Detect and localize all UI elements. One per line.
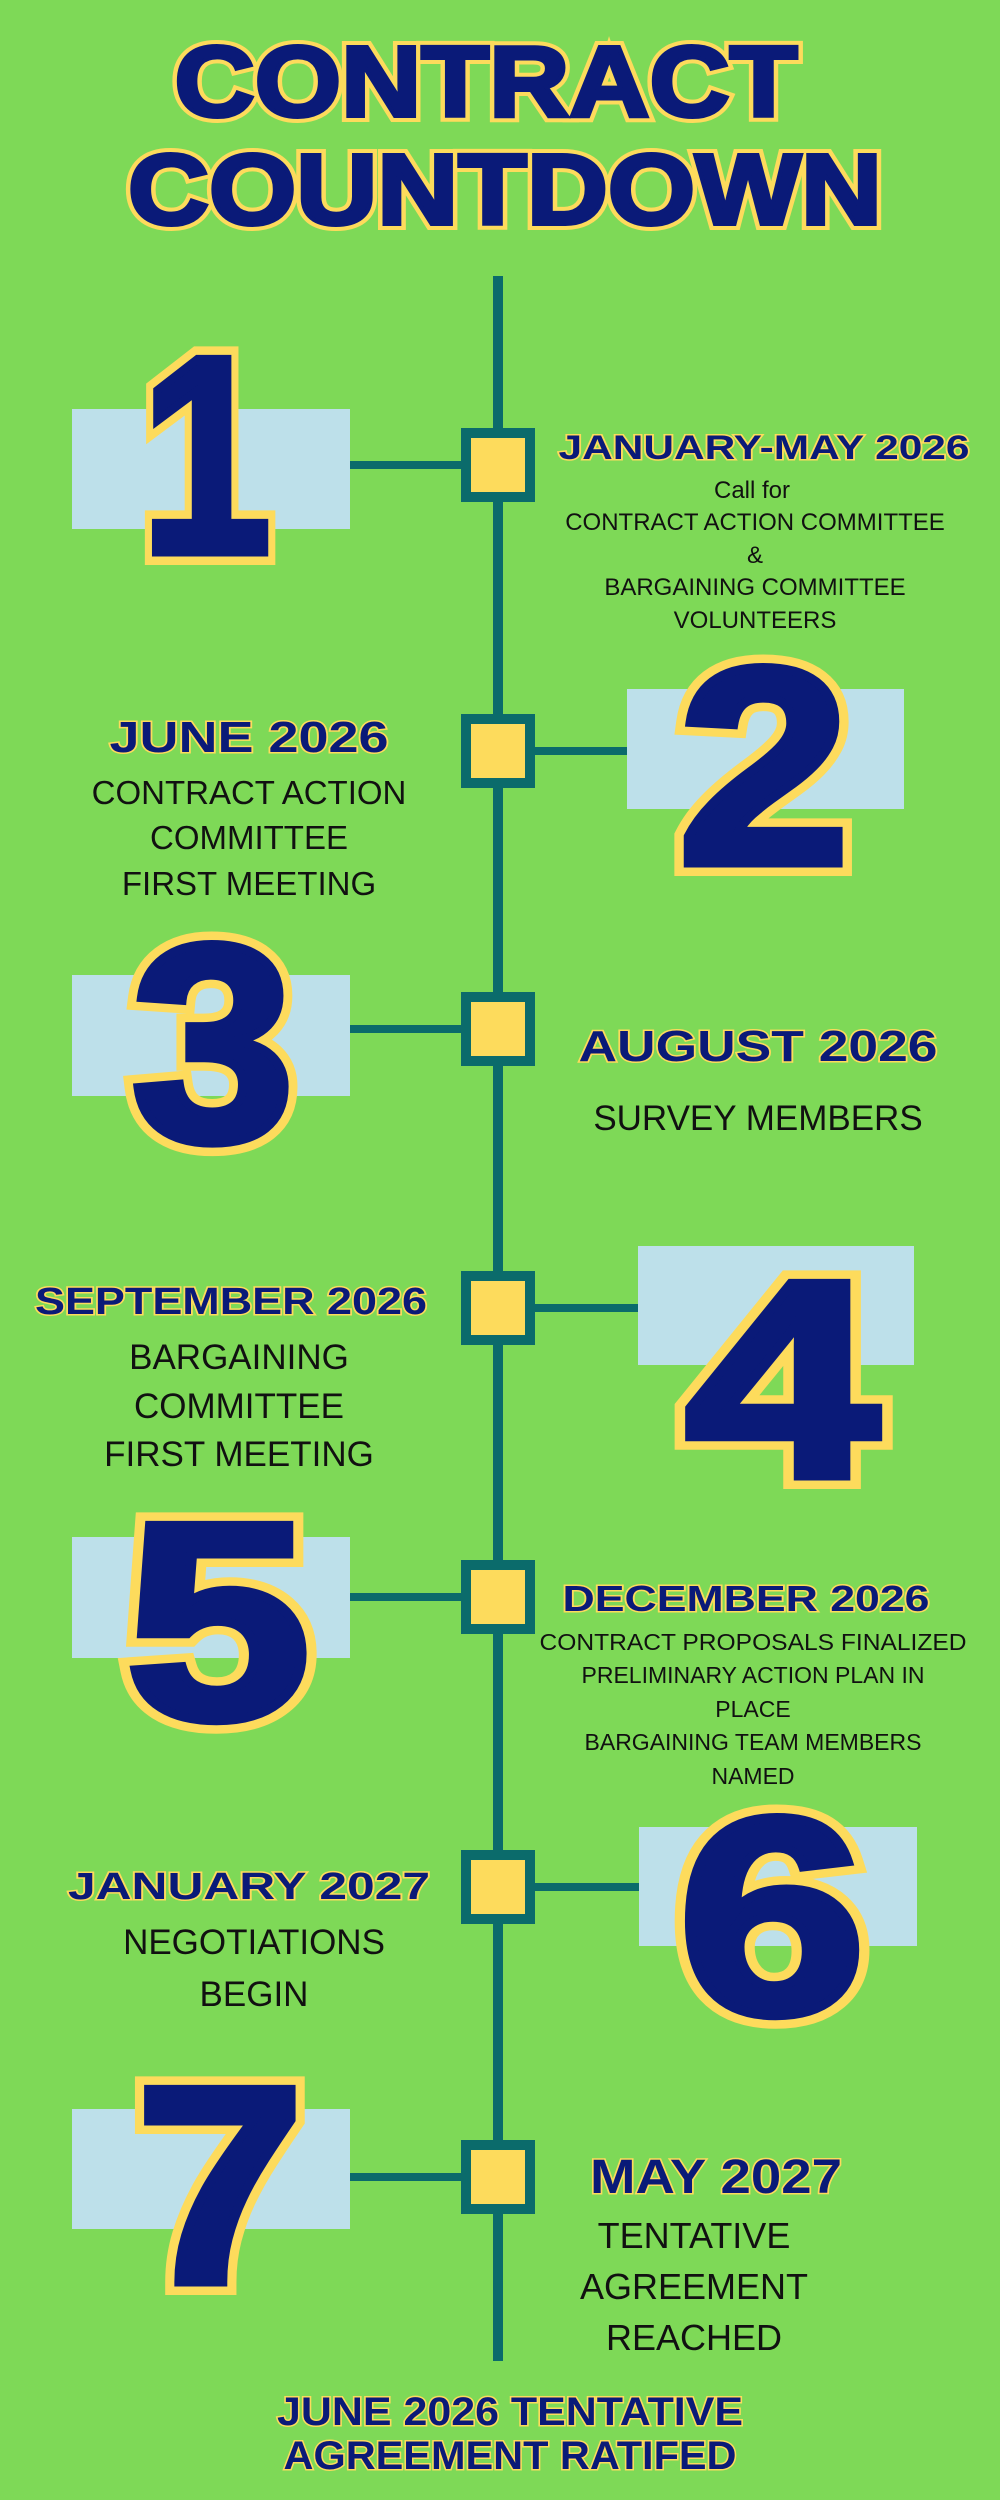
- number 1 block: [72, 300, 350, 612]
- text 6: JANUARY 2027: [68, 1866, 430, 1908]
- marker 4: [466, 1276, 530, 1340]
- connector 2: [535, 747, 627, 755]
- text 5: [540, 1578, 966, 1789]
- title: COUNTDOWN: [128, 134, 882, 246]
- text 5: DECEMBER 2026: [562, 1578, 930, 1619]
- marker 3: [466, 997, 530, 1061]
- text 1: JANUARY-MAY 2026: [558, 429, 970, 467]
- text 1: CONTRACT ACTION COMMITTEE: [565, 509, 945, 536]
- text 3: SURVEY MEMBERS: [593, 1099, 923, 1138]
- step 6: [68, 1761, 917, 2073]
- step 7: [72, 2030, 842, 2358]
- step 4: [35, 1224, 914, 1536]
- connector 4: [535, 1304, 638, 1312]
- step 5: [72, 1466, 966, 1789]
- text 7: MAY 2027: [590, 2151, 842, 2204]
- text 2: JUNE 2026: [110, 713, 388, 762]
- number 7 block: 7: [136, 2030, 304, 2342]
- number 6 block: 6: [678, 1761, 866, 2073]
- number 4 block: 4: [686, 1224, 881, 1536]
- number 7 block: [72, 2030, 350, 2342]
- text 5: NAMED: [711, 1763, 795, 1789]
- timeline line: [493, 276, 503, 2361]
- number 1 block: 1: [141, 300, 271, 612]
- text 1: Call for: [714, 477, 790, 504]
- step 2: [92, 611, 904, 923]
- text 6: [68, 1866, 430, 2014]
- text 6: BEGIN: [200, 1975, 308, 2014]
- number 2 block: 2: [678, 611, 850, 923]
- text 1: BARGAINING COMMITTEE: [604, 574, 906, 601]
- title: CONTRACT: [174, 26, 798, 138]
- text 5: PLACE: [715, 1696, 791, 1722]
- text 5: CONTRACT PROPOSALS FINALIZED: [540, 1629, 966, 1655]
- text 3: AUGUST 2026: [578, 1022, 938, 1071]
- text 1: VOLUNTEERS: [674, 607, 836, 634]
- text 7: AGREEMENT: [580, 2266, 808, 2307]
- text 2: [92, 713, 406, 902]
- number 2 block: [627, 611, 904, 923]
- step 1: [72, 300, 970, 634]
- text 3: [578, 1022, 938, 1138]
- number 4 block: 4: [686, 1224, 881, 1536]
- number 3 block: [72, 888, 350, 1200]
- number 5 block: 5: [126, 1466, 310, 1778]
- number 2 block: 2: [678, 611, 850, 923]
- connector 7: [350, 2173, 462, 2181]
- text 5: PRELIMINARY ACTION PLAN IN: [582, 1662, 924, 1688]
- marker 2: [466, 719, 530, 783]
- text 7: REACHED: [606, 2317, 782, 2358]
- connector 1: [350, 461, 462, 469]
- marker 5: [466, 1565, 530, 1629]
- text 2: CONTRACT ACTION: [92, 774, 406, 811]
- number 7 block: 7: [136, 2030, 304, 2342]
- text 7: TENTATIVE: [598, 2215, 790, 2256]
- text 1: &: [747, 542, 763, 569]
- text 2: COMMITTEE: [150, 819, 348, 856]
- text 1: [558, 429, 970, 634]
- text 4: FIRST MEETING: [104, 1435, 374, 1474]
- title: [128, 26, 882, 246]
- text 5: BARGAINING TEAM MEMBERS: [585, 1729, 921, 1755]
- text 4: BARGAINING: [129, 1338, 349, 1377]
- text 2: FIRST MEETING: [122, 865, 376, 902]
- title: COUNTDOWN: [128, 134, 882, 246]
- number 1 block: 1: [141, 300, 271, 612]
- marker 7: [466, 2145, 530, 2209]
- text 7: [580, 2151, 842, 2358]
- number 5 block: 5: [126, 1466, 310, 1778]
- footer: [277, 2390, 743, 2478]
- footer: JUNE 2026 TENTATIVE: [277, 2390, 743, 2434]
- number 5 block: [72, 1466, 350, 1778]
- connector 5: [350, 1593, 462, 1601]
- connector 6: [535, 1883, 639, 1891]
- text 4: [35, 1281, 427, 1474]
- title: CONTRACT: [174, 26, 798, 138]
- number 6 block: 6: [678, 1761, 866, 2073]
- number 4 block: [638, 1224, 914, 1536]
- text 4: COMMITTEE: [134, 1387, 344, 1426]
- number 3 block: 3: [132, 888, 294, 1200]
- connector 3: [350, 1025, 462, 1033]
- footer: AGREEMENT RATIFED: [284, 2434, 736, 2478]
- text 6: NEGOTIATIONS: [123, 1923, 385, 1962]
- number 6 block: [639, 1761, 917, 2073]
- marker 6: [466, 1855, 530, 1919]
- marker 1: [466, 433, 530, 497]
- step 3: [72, 888, 938, 1200]
- number 3 block: 3: [132, 888, 294, 1200]
- text 4: SEPTEMBER 2026: [35, 1281, 427, 1323]
